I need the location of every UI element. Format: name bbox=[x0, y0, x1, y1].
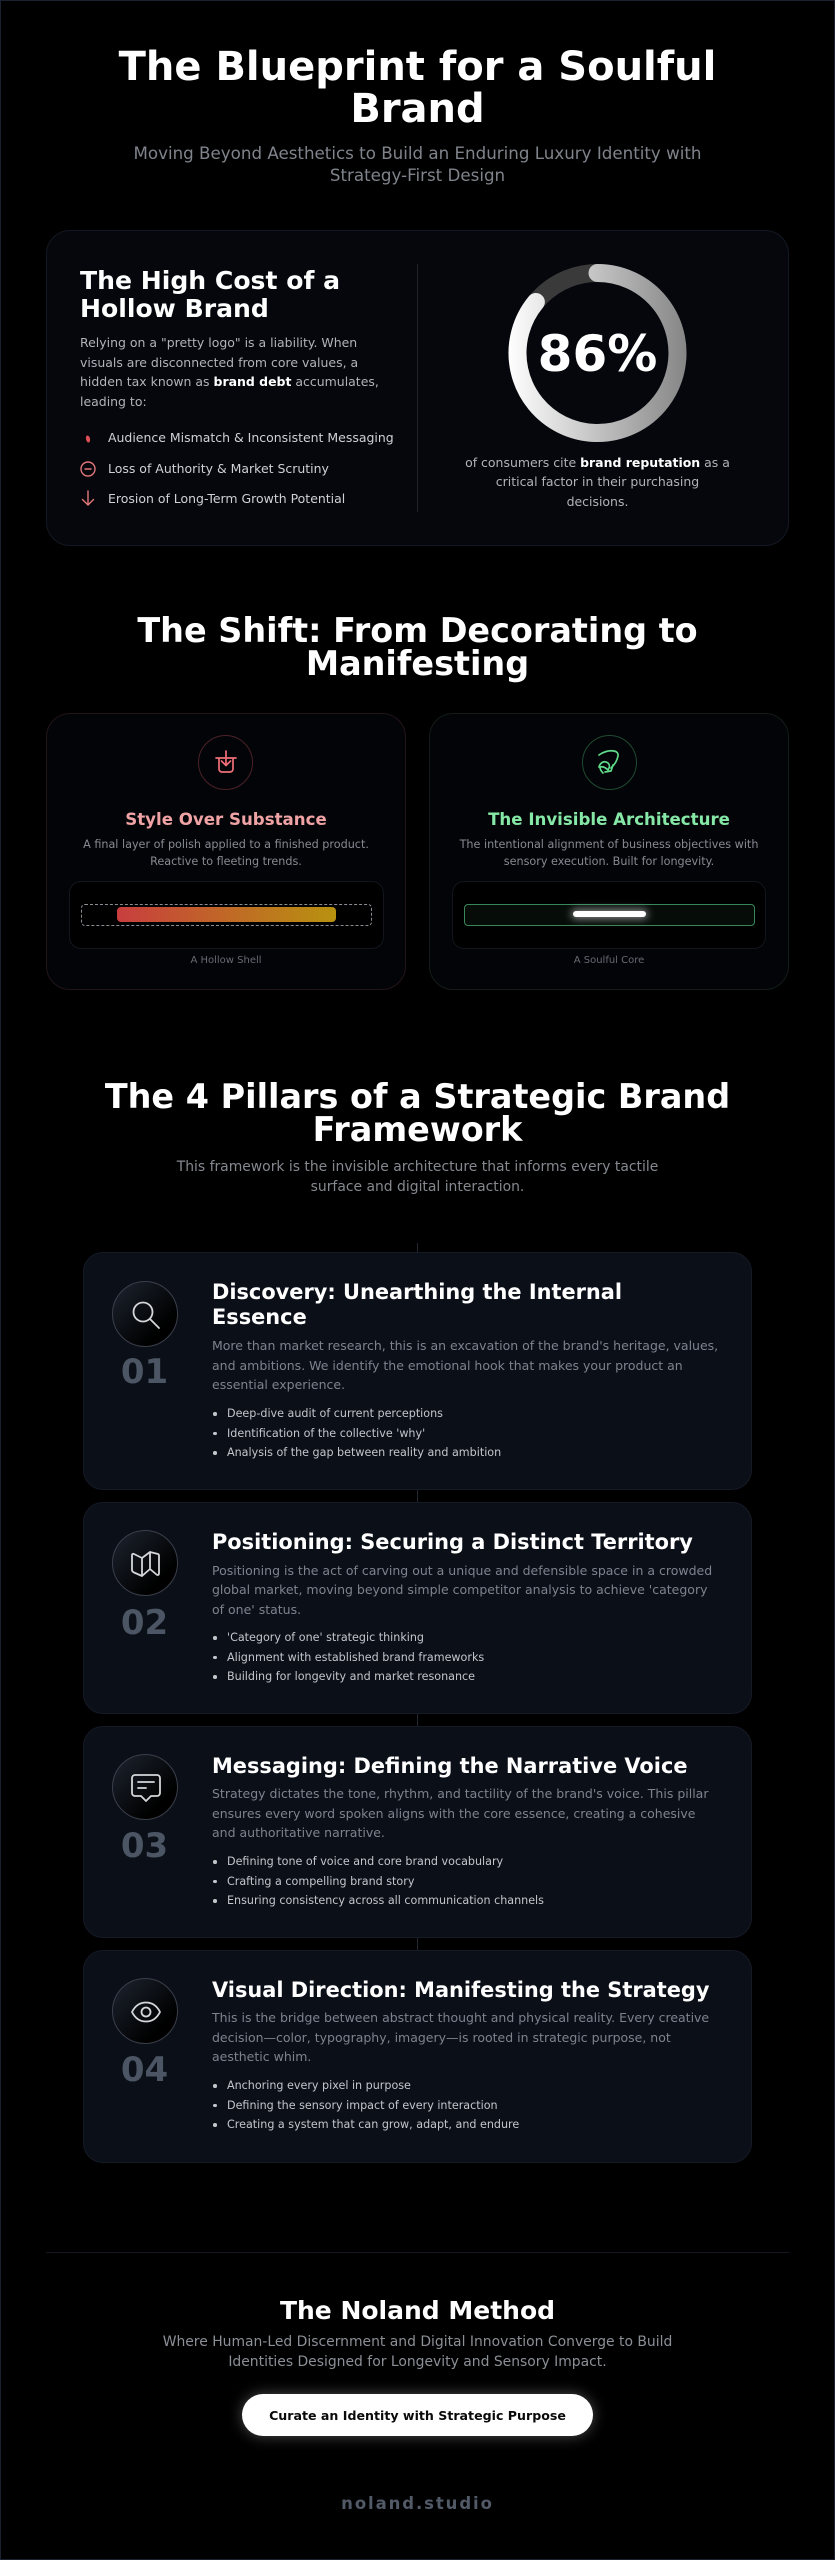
icon: basket with arrow bbox=[198, 735, 253, 790]
pillar description bbox=[212, 1338, 718, 1392]
panel body text: Relying on a "pretty logo" is a liability. When bbox=[80, 335, 357, 350]
pillar description: ensures every word spoken aligns with the core essence, creating a cohesive bbox=[212, 1806, 696, 1820]
title: Brand bbox=[350, 86, 485, 132]
diagram label: A Soulful Core bbox=[574, 954, 644, 966]
number 04: 04 bbox=[121, 2050, 168, 2090]
pillar heading: Messaging: Defining the Narrative Voice bbox=[212, 1754, 688, 1778]
panel body text bbox=[80, 335, 379, 408]
heading: 4 pillars: Framework bbox=[313, 1110, 522, 1149]
pillar list: Analysis of the gap between reality and ambition bbox=[227, 1446, 501, 1459]
pillar description: global market, moving beyond simple competitor analysis to achieve 'category bbox=[212, 1582, 707, 1597]
card description: A final layer of polish applied to a finished product. bbox=[83, 838, 369, 851]
pillar heading bbox=[212, 1280, 622, 1329]
subtitle: Moving Beyond Aesthetics to Build an Enduring Luxury Identity with bbox=[133, 142, 702, 162]
pillar list: Anchoring every pixel in purpose bbox=[227, 2079, 411, 2092]
icon: arrow down bbox=[82, 490, 94, 506]
card description bbox=[83, 838, 369, 868]
pillar list: Defining tone of voice and core brand vocabulary bbox=[227, 1855, 503, 1868]
list item: erosion: Erosion of Long-Term Growth Potential bbox=[108, 491, 345, 506]
panel: pillar 1 discovery bbox=[83, 1252, 752, 1490]
panel: pillar 2 positioning bbox=[83, 1502, 752, 1714]
pillar heading: Visual Direction: Manifesting the Strategy bbox=[212, 1978, 709, 2002]
pillar list bbox=[213, 1631, 484, 1683]
pillar list: Alignment with established brand frameworks bbox=[227, 1650, 484, 1664]
button: call to action bbox=[242, 2394, 593, 2436]
diagram: soulful core bbox=[452, 881, 766, 948]
number 01: 01 bbox=[121, 1352, 168, 1392]
pillar heading: Positioning: Securing a Distinct Territory bbox=[212, 1530, 693, 1554]
heading: the noland method: The Noland Method bbox=[280, 2296, 555, 2325]
icon: magnifier bbox=[112, 1281, 178, 1347]
icon: circle minus bbox=[80, 461, 96, 477]
pillar list: Crafting a compelling brand story bbox=[227, 1874, 414, 1888]
panel heading: Hollow Brand bbox=[80, 294, 269, 323]
panel: style over substance bbox=[46, 713, 406, 990]
card description: The intentional alignment of business objectives with bbox=[460, 838, 758, 851]
footer divider bbox=[46, 2252, 789, 2253]
pillar description: Strategy dictates the tone, rhythm, and tactility of the brand's voice. This pillar bbox=[212, 1786, 708, 1801]
subtitle: Strategy-First Design bbox=[330, 165, 505, 185]
closing text bbox=[163, 2334, 672, 2370]
panel body text: visuals are disconnected from core values, a bbox=[80, 354, 358, 370]
pillar description: and ambitions. We identify the emotional hook that makes your product an bbox=[212, 1358, 683, 1372]
chart: 86 percent donut bbox=[508, 264, 686, 442]
pillar description bbox=[212, 2010, 709, 2064]
stat value: 86% bbox=[538, 325, 657, 383]
panel: pillar 4 visual direction bbox=[83, 1950, 752, 2162]
panel heading: The High Cost of a bbox=[80, 266, 340, 295]
card heading: The Invisible Architecture bbox=[488, 810, 730, 829]
panel: the invisible architecture bbox=[429, 713, 789, 990]
diagram: hollow shell bbox=[69, 881, 384, 948]
number 03: 03 bbox=[121, 1826, 168, 1866]
pillar description: aesthetic whim. bbox=[212, 2049, 311, 2064]
pillar list: Creating a system that can grow, adapt, and endure bbox=[227, 2118, 519, 2131]
stat caption: of consumers cite brand reputation as a bbox=[465, 454, 730, 470]
heading: the shift bbox=[137, 610, 698, 683]
icon: eye bbox=[112, 1978, 178, 2044]
heading: the shift: Manifesting bbox=[306, 644, 529, 683]
pillar description: More than market research, this is an excavation of the brand's heritage, values, bbox=[212, 1338, 718, 1353]
stat caption: critical factor in their purchasing bbox=[496, 474, 699, 489]
icon: misalignment mark bbox=[86, 436, 90, 442]
pillar description: Positioning is the act of carving out a unique and defensible space in a crowded bbox=[212, 1562, 712, 1578]
title bbox=[118, 44, 716, 132]
pillar list bbox=[213, 1855, 544, 1907]
heading: 4 pillars bbox=[105, 1076, 730, 1149]
pillar list: Identification of the collective 'why' bbox=[227, 1426, 425, 1440]
closing text: Identities Designed for Longevity and Sensory Impact. bbox=[228, 2354, 607, 2370]
pillar list: Defining the sensory impact of every interaction bbox=[227, 2098, 498, 2112]
pillar description: of one' status. bbox=[212, 1602, 301, 1616]
panel body text: hidden tax known as brand debt accumulates, bbox=[80, 374, 379, 389]
pillar description: essential experience. bbox=[212, 1377, 345, 1392]
panel body text: leading to: bbox=[80, 394, 147, 408]
stat caption: decisions. bbox=[567, 494, 628, 508]
pillar description: decision—color, typography, imagery—is rooted in strategic purpose, not bbox=[212, 2030, 671, 2044]
button: call to action: Curate an Identity with Strategic Purpose bbox=[269, 2408, 566, 2423]
timeline line bbox=[417, 1243, 418, 1963]
pillar list bbox=[213, 1407, 501, 1459]
diagram label: A Hollow Shell bbox=[190, 954, 262, 966]
title: The Blueprint for a Soulful bbox=[119, 44, 716, 90]
closing text: Where Human-Led Discernment and Digital Innovation Converge to Build bbox=[163, 2334, 672, 2350]
pillar list: 'Category of one' strategic thinking bbox=[227, 1631, 424, 1644]
footer brand: noland.studio bbox=[341, 2494, 494, 2512]
pillar list: Building for longevity and market resonance bbox=[227, 1670, 475, 1683]
pillar list: Deep-dive audit of current perceptions bbox=[227, 1407, 443, 1420]
section intro: surface and digital interaction. bbox=[311, 1179, 524, 1195]
icon: green squiggle bbox=[582, 735, 636, 790]
icon: message bbox=[112, 1754, 178, 1820]
stat caption bbox=[465, 454, 730, 508]
pillar heading: Discovery: Unearthing the Internal bbox=[212, 1280, 622, 1304]
list item: loss of authority: Loss of Authority & Market Scrutiny bbox=[108, 460, 329, 476]
card heading: Style Over Substance bbox=[125, 810, 327, 829]
list item: audience mismatch: Audience Mismatch & Inconsistent Messaging bbox=[108, 430, 394, 445]
pillar list: Ensuring consistency across all communication channels bbox=[227, 1894, 544, 1907]
panel: high cost of a hollow brand bbox=[46, 230, 789, 546]
heading: the shift: The Shift: From Decorating to bbox=[137, 610, 698, 650]
section intro: This framework is the invisible architecture that informs every tactile bbox=[177, 1159, 658, 1175]
section intro bbox=[176, 1159, 658, 1195]
heading: 4 pillars: The 4 Pillars of a Strategic Brand bbox=[105, 1076, 730, 1116]
panel divider bbox=[417, 264, 418, 512]
pillar description bbox=[212, 1562, 712, 1616]
pillar description bbox=[212, 1786, 708, 1840]
pillar description: and authoritative narrative. bbox=[212, 1825, 385, 1840]
panel: pillar 3 messaging bbox=[83, 1726, 752, 1938]
pillar list bbox=[213, 2079, 519, 2131]
panel heading bbox=[80, 266, 340, 323]
number 02: 02 bbox=[121, 1602, 168, 1642]
card description: Reactive to fleeting trends. bbox=[150, 855, 302, 868]
pillar description: This is the bridge between abstract thought and physical reality. Every creative bbox=[212, 2010, 709, 2025]
subtitle bbox=[133, 142, 702, 185]
card description: sensory execution. Built for longevity. bbox=[504, 855, 714, 868]
icon: map bbox=[112, 1530, 178, 1596]
card description bbox=[460, 838, 758, 868]
pillar heading: Essence bbox=[212, 1305, 307, 1329]
